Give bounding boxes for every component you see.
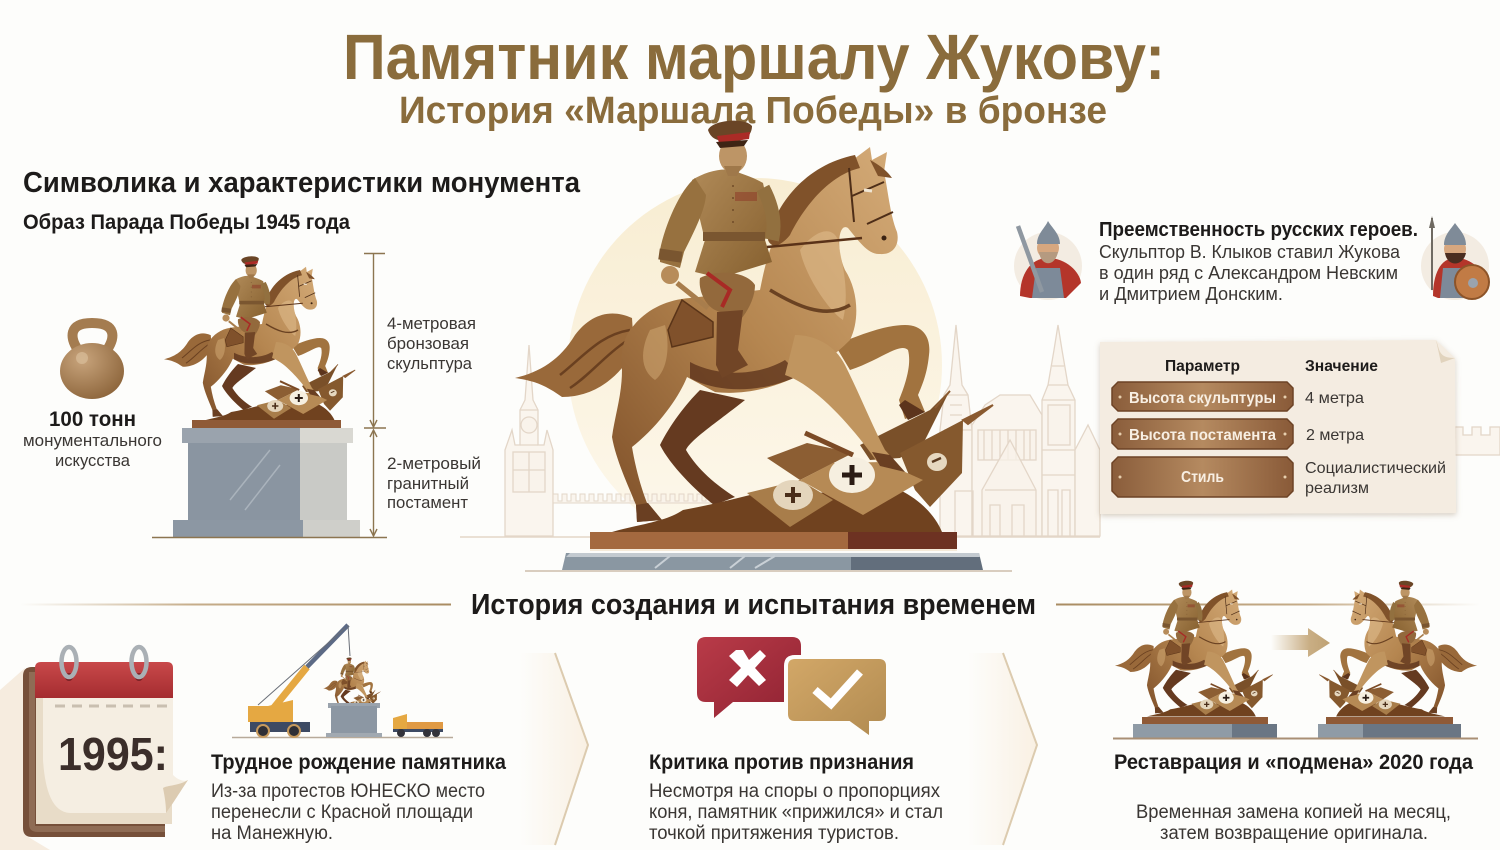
row: sculpture height: Высота скульптуры [1129, 390, 1276, 407]
stone plinth [562, 553, 983, 570]
bronze plinth [590, 532, 957, 551]
panel: parameter table on parchment [1100, 340, 1456, 514]
chevron arrow 2 [968, 653, 1037, 845]
weight callout [23, 408, 162, 470]
step text: коня, памятник «прижился» и стал [649, 802, 943, 823]
label: sculpture height [387, 314, 476, 373]
panel: criticism step [649, 637, 943, 844]
row: pedestal height: 2 метра [1306, 427, 1364, 444]
step text: Реставрация и «подмена» 2020 года [1114, 751, 1473, 774]
panel heading: Символика и характеристики монумента [23, 167, 581, 199]
icon: warrior with shield [1421, 216, 1489, 300]
icon: speech bubbles [697, 637, 888, 739]
parchment background [1100, 340, 1456, 514]
statue original [1115, 581, 1277, 738]
small statue with bronze plinth [164, 256, 355, 421]
replacement arrow [1271, 628, 1330, 657]
title: Памятник маршалу Жукову: [343, 21, 1165, 93]
icon: warrior with sword [1014, 221, 1082, 300]
continuity text: Преемственность русских героев. [1099, 219, 1418, 241]
dimension arrows [152, 253, 387, 538]
panel: continuity of heroes [1014, 216, 1489, 304]
label: pedestal height: гранитный [387, 474, 469, 493]
weight callout: монументального [23, 431, 162, 450]
table header: Параметр [1165, 358, 1240, 375]
panel: 1995 history step [0, 625, 506, 850]
step text [1114, 751, 1473, 844]
row: style [1112, 457, 1446, 497]
main equestrian statue [515, 121, 993, 532]
row: style: реализм [1305, 480, 1369, 497]
row: style: Стиль [1181, 469, 1224, 486]
step text: затем возвращение оригинала. [1160, 823, 1428, 844]
subtitle: История «Маршала Победы» в бронзе [399, 90, 1107, 132]
Kremlin skyline background [505, 325, 1500, 536]
panel: restoration step [1113, 581, 1478, 844]
panel subheading: Образ Парада Победы 1945 года [23, 211, 350, 234]
row: pedestal height: Высота постамента [1129, 427, 1276, 444]
small plinth top [192, 420, 341, 429]
icon: crane lifting statue [232, 625, 453, 738]
step text: Трудное рождение памятника [211, 751, 506, 774]
step text: на Манежную. [211, 823, 333, 844]
step text: Несмотря на споры о пропорциях [649, 781, 940, 802]
row: sculpture height [1112, 382, 1364, 411]
sun disc [568, 178, 942, 552]
table header [1165, 358, 1378, 375]
granite pedestal [173, 428, 360, 537]
chevron arrow 1 [520, 653, 588, 845]
label: pedestal height [387, 454, 481, 512]
row: sculpture height: 4 метра [1305, 390, 1364, 407]
section: central monument [515, 121, 1012, 571]
label: pedestal height: постамент [387, 493, 468, 512]
weight callout: 100 тонн [49, 408, 136, 431]
step text: Временная замена копией на месяц, [1136, 802, 1451, 823]
table header: Значение [1305, 358, 1378, 375]
step text: Из-за протестов ЮНЕСКО место [211, 781, 485, 802]
ground shadow line [525, 570, 1012, 572]
continuity text: Скульптор В. Клыков ставил Жукова [1099, 242, 1401, 262]
label: pedestal height: 2-метровый [387, 454, 481, 473]
icon: tear-off calendar: 1995: [58, 728, 168, 780]
icon: kettlebell weight [60, 323, 124, 399]
label: sculpture height: 4-метровая [387, 314, 476, 333]
icon: tear-off calendar [0, 647, 188, 850]
row: pedestal height [1112, 419, 1364, 449]
step text: перенесли с Красной площади [211, 802, 473, 823]
continuity text: и Дмитрием Донским. [1099, 284, 1283, 304]
ground line under skyline [460, 536, 1100, 538]
step text: точкой притяжения туристов. [649, 823, 899, 844]
label: sculpture height: бронзовая [387, 334, 469, 353]
row: style: Социалистический [1305, 460, 1446, 477]
ground line [1113, 738, 1478, 740]
continuity text [1099, 219, 1418, 304]
step text [211, 751, 506, 844]
section heading: history: История создания и испытания временем [471, 589, 1036, 621]
label: sculpture height: скульптура [387, 354, 473, 373]
step text: Критика против признания [649, 751, 914, 774]
continuity text: в один ряд с Александром Невским [1099, 263, 1398, 283]
statue copy [1318, 581, 1477, 738]
weight callout: искусства [55, 451, 131, 470]
panel: symbolism and characteristics [23, 167, 581, 538]
step text [649, 751, 943, 844]
